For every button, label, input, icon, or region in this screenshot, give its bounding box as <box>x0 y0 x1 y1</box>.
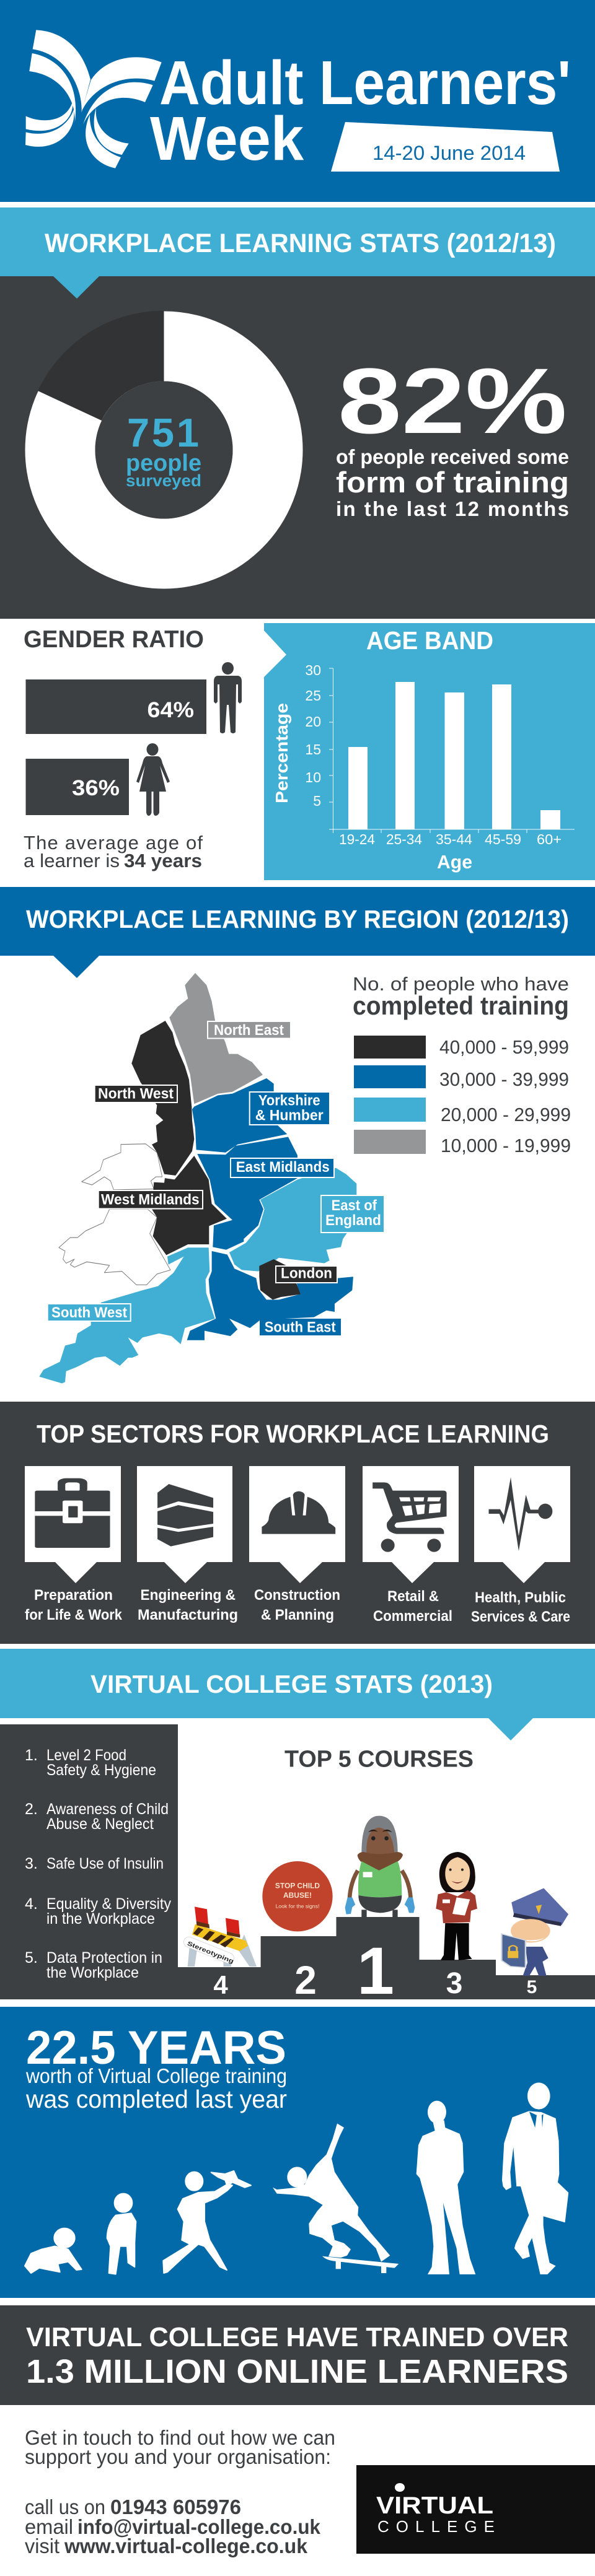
sector labels: & Planning <box>261 1607 334 1623</box>
sector labels: Engineering & <box>140 1587 236 1604</box>
illustration: police officer <box>501 1888 568 1976</box>
heading: gender ratio: GENDER RATIO <box>24 626 204 653</box>
panel: course list: Awareness of Child <box>46 1801 169 1818</box>
bar chart: age band: 25 <box>305 688 321 704</box>
bar chart: age band: 30 <box>305 662 321 678</box>
bar chart: age band: 15 <box>305 741 321 758</box>
sector labels: Commercial <box>373 1608 452 1625</box>
panel: course list: Level 2 Food <box>46 1747 126 1764</box>
sector labels: Services & Care <box>471 1609 570 1625</box>
legend: people who completed training: No. of people who have <box>353 973 569 995</box>
section heading: workplace learning stats: WORKPLACE LEARNING STATS (2012/13) <box>45 229 556 258</box>
stat caption: worth of Virtual College training <box>25 2064 287 2087</box>
section heading: workplace learning by region <box>0 887 595 978</box>
bar chart: age band: Percentage <box>272 703 291 803</box>
map label: South East: South East <box>265 1319 336 1336</box>
date badge <box>331 122 560 172</box>
section heading: workplace learning by region: WORKPLACE LEARNING BY REGION (2012/13) <box>26 905 569 933</box>
donut label: 751 people surveyed: 751 <box>127 410 199 455</box>
bar chart: age band: 5 <box>313 793 321 809</box>
text: average age: The average age of <box>24 832 203 854</box>
text: get in touch: support you and your organisation: <box>25 2445 331 2468</box>
donut label: 751 people surveyed <box>126 410 201 490</box>
icon: heartbeat <box>489 1477 552 1551</box>
panel: course list: Safe Use of Insulin <box>46 1855 164 1872</box>
text: contact details: email <box>25 2515 73 2538</box>
bar chart: age band: 35-44 <box>436 831 472 847</box>
bar chart: age band <box>272 662 575 873</box>
text: contact details: visit <box>25 2535 60 2557</box>
podium: 4 <box>213 1970 228 1999</box>
silhouette: skateboarder <box>273 2123 399 2273</box>
illustration: third-place character <box>436 1852 477 1960</box>
icon: hard hat <box>262 1491 335 1534</box>
sector cards <box>25 1466 570 1583</box>
panel: 1.3 million learners: VIRTUAL COLLEGE HAVE TRAINED OVER <box>26 2322 568 2352</box>
silhouette: baby <box>25 2229 82 2273</box>
panel: course list: Safety & Hygiene <box>46 1762 156 1779</box>
bar: female 36%: 36% <box>72 776 120 800</box>
panel: course list: Abuse & Neglect <box>46 1815 154 1833</box>
panel: course list <box>0 1724 178 1999</box>
logo: Virtual College: COLLEGE <box>377 2517 495 2536</box>
text: average age: 34 years <box>124 850 202 871</box>
bar chart: age band: 25-34 <box>386 831 422 847</box>
sector icons <box>35 1477 552 1552</box>
section heading: workplace learning stats <box>0 207 595 276</box>
illustration: older life stages silhouettes <box>273 2082 568 2274</box>
text: contact details <box>25 2495 321 2557</box>
stat caption: in the last 12 months <box>336 497 569 520</box>
heading: top 5 courses: TOP 5 COURSES <box>284 1747 474 1773</box>
legend: people who completed training: completed training <box>353 991 569 1020</box>
panel: course list: 5. <box>25 1949 38 1967</box>
icon: stop child abuse badge <box>262 1861 333 1931</box>
panel: 1.3 million learners <box>0 2305 595 2405</box>
illustration: first-place character <box>345 1816 415 1917</box>
map label: Yorkshire and Humber <box>250 1092 330 1125</box>
bar: male 64%: 64% <box>148 698 194 722</box>
sector labels: Manufacturing <box>138 1607 238 1623</box>
text: average age: a learner is <box>24 850 120 871</box>
map label: East of England: East of <box>332 1197 377 1214</box>
map label: East Midlands: East Midlands <box>236 1159 330 1176</box>
podium: 1 <box>357 1933 394 2008</box>
silhouette: toddler <box>107 2194 136 2274</box>
podium: 3 <box>446 1967 462 2000</box>
sector labels <box>25 1587 570 1625</box>
icon: stereotyping barrier: Stereotyping <box>186 1941 235 1965</box>
map label: Yorkshire and Humber: & Humber <box>255 1107 324 1124</box>
icon: Adult Learners' Week logo <box>25 30 162 168</box>
icon: briefcase <box>35 1478 110 1548</box>
bar chart: age band: Age <box>437 851 472 873</box>
heading: Week: Week <box>150 104 304 173</box>
panel: course list: 4. <box>25 1895 38 1913</box>
map label: South West: South West <box>51 1304 127 1321</box>
map label: East of England: England <box>325 1212 381 1229</box>
panel: course list: 3. <box>25 1855 38 1872</box>
date badge: 14-20 June 2014 <box>372 142 526 164</box>
section heading: virtual college stats <box>0 1649 595 1740</box>
legend: people who completed training: 30,000 - 39,999 <box>439 1068 569 1090</box>
panel: course list: 2. <box>25 1801 38 1818</box>
text: get in touch <box>25 2426 335 2468</box>
stat caption: of people received some <box>336 445 569 468</box>
donut label: 751 people surveyed: surveyed <box>126 471 201 490</box>
sector labels: Health, Public <box>475 1589 566 1606</box>
icon: shopping cart <box>372 1482 447 1552</box>
stat: 82%: 82% <box>338 349 567 453</box>
text: contact details: info@virtual-college.co.uk <box>77 2515 321 2538</box>
silhouette: young man <box>416 2101 475 2274</box>
bar: female 36% <box>26 759 129 815</box>
panel: survey stats <box>0 276 595 619</box>
icon: stereotyping barrier <box>182 1906 257 1967</box>
legend: people who completed training <box>353 973 571 1156</box>
panel: gender ratio <box>24 626 242 871</box>
sector labels: Retail & <box>387 1588 439 1605</box>
panel: 1.3 million learners: 1.3 MILLION ONLINE LEARNERS <box>26 2353 568 2390</box>
panel: course list: the Workplace <box>46 1964 139 1981</box>
panel: course list: in the Workplace <box>46 1910 155 1928</box>
donut label: 751 people surveyed: people <box>126 450 201 476</box>
panel: course list: Data Protection in <box>46 1949 162 1967</box>
bar chart: age band: 45-59 <box>485 831 521 847</box>
podium: 2 <box>294 1958 317 2002</box>
map label: East of England <box>321 1195 384 1233</box>
legend: people who completed training: 20,000 - 29,999 <box>441 1104 571 1125</box>
icon: engineering stack <box>157 1484 213 1547</box>
logo: Virtual College: VIRTUAL <box>376 2492 493 2519</box>
panel: age band <box>264 623 595 880</box>
text: get in touch: Get in touch to find out how we can <box>25 2426 335 2449</box>
text: contact details: 01943 605976 <box>110 2495 241 2518</box>
sector labels: Construction <box>254 1587 340 1604</box>
icon: woman <box>136 743 170 816</box>
text: contact details: call us on <box>25 2495 105 2518</box>
panel: course list: 1. <box>25 1747 38 1764</box>
stat caption <box>25 2064 287 2113</box>
panel: header banner <box>0 0 595 202</box>
panel: 22.5 years <box>0 2007 595 2298</box>
map label: North West: North West <box>98 1085 174 1102</box>
podium: 5 <box>527 1977 537 1997</box>
bar chart: age band: 60+ <box>537 831 562 847</box>
icon: man <box>214 662 242 733</box>
illustration: young life stages silhouettes <box>25 2171 251 2274</box>
silhouette: child with plane <box>163 2171 251 2273</box>
icon: stop child abuse badge: ABUSE! <box>283 1891 312 1900</box>
map label: West Midlands: West Midlands <box>101 1192 200 1208</box>
panel: course list: Equality & Diversity <box>46 1895 171 1913</box>
donut chart: 82 percent <box>38 311 268 554</box>
map label: North East: North East <box>214 1022 284 1039</box>
stat caption <box>336 445 569 520</box>
bar chart: age band: 10 <box>305 769 321 785</box>
silhouette: businessman <box>502 2082 568 2274</box>
heading: top sectors: TOP SECTORS FOR WORKPLACE LEARNING <box>37 1420 549 1448</box>
legend: people who completed training: 10,000 - 19,999 <box>441 1135 571 1156</box>
heading: age band: AGE BAND <box>366 626 493 655</box>
stat caption: was completed last year <box>25 2085 287 2113</box>
podium <box>178 1917 595 2008</box>
sector labels: for Life & Work <box>25 1607 123 1623</box>
text: contact details: www.virtual-college.co.uk <box>64 2535 308 2557</box>
panel: top sectors <box>0 1402 595 1644</box>
text: average age <box>24 832 203 871</box>
bar chart: age band: 20 <box>305 714 321 730</box>
map label: London: London <box>281 1265 332 1282</box>
bar: male 64% <box>26 679 206 734</box>
legend: people who completed training: 40,000 - 59,999 <box>439 1036 569 1058</box>
sector labels: Preparation <box>34 1587 113 1604</box>
icon: stop child abuse badge: Look for the signs! <box>276 1903 319 1910</box>
stat: 22.5 years: 22.5 YEARS <box>26 2022 286 2074</box>
icon: stop child abuse badge: STOP CHILD <box>275 1881 320 1890</box>
bar chart: age band: 19-24 <box>339 831 375 847</box>
logo: Virtual College <box>356 2465 595 2554</box>
map label: Yorkshire and Humber: Yorkshire <box>258 1093 320 1109</box>
stat caption: form of training <box>336 466 569 499</box>
map: English regions <box>39 973 384 1383</box>
section heading: virtual college stats: VIRTUAL COLLEGE STATS (2013) <box>90 1670 493 1698</box>
